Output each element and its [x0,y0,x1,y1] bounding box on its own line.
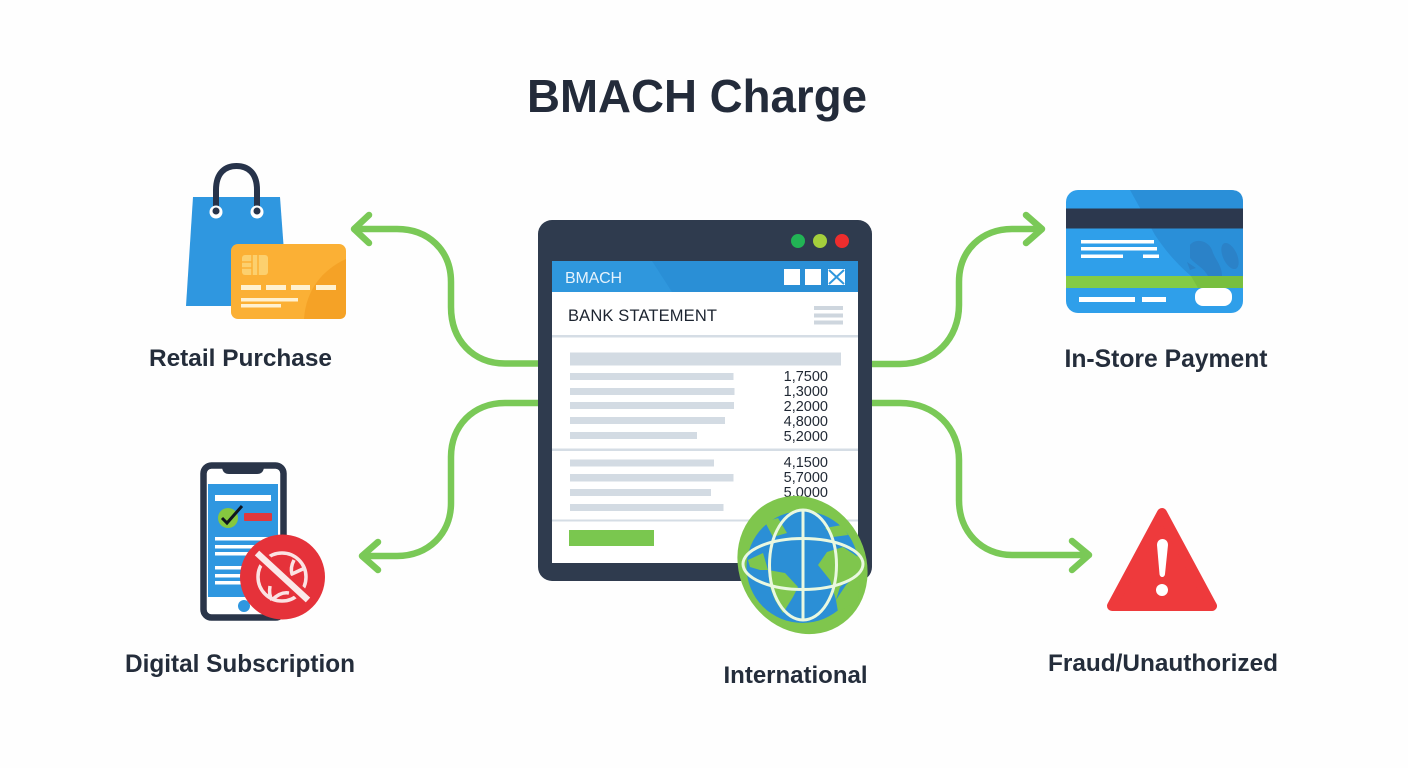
title: BMACH Charge [527,70,867,122]
amounts column: 5,0000 [784,485,828,501]
green stripe [1066,276,1243,288]
label: digital subscription: Digital Subscription [125,650,355,678]
menu icon [814,306,843,324]
blue header bar: BMACH [565,270,622,287]
amounts column [784,369,828,501]
phone content [215,495,272,584]
arrow: to digital subscription [362,403,539,570]
amounts column: 1,7500 [784,369,828,385]
amounts column: 4,8000 [784,414,828,430]
icon: globe [712,472,893,658]
window control dots [791,234,849,248]
amounts column: 4,1500 [784,455,828,471]
icon: card back [1066,190,1243,313]
card text lines [1079,240,1232,306]
phone body [204,466,284,618]
statement heading: BANK STATEMENT [568,307,717,325]
amounts column: 5,2000 [784,429,828,445]
arrow: to fraud [871,403,1089,570]
panel: bank statement window [125,166,1278,689]
label: retail purchase: Retail Purchase [149,345,332,372]
amounts column: 2,2000 [784,399,828,415]
arrow: to retail purchase [354,215,539,364]
magnetic stripe [1066,208,1243,228]
window content sheet [552,292,858,563]
label: in-store payment: In-Store Payment [1064,346,1268,373]
statement table [552,335,858,546]
amounts column: 5,7000 [784,470,828,486]
red blocked badge [240,534,325,620]
watermark [1187,240,1242,276]
label: fraud/unauthorized: Fraud/Unauthorized [1048,650,1278,677]
icon: warning triangle [1112,513,1212,606]
icon: phone with blocked subscription [204,466,325,620]
arrow: to in-store payment [871,215,1042,364]
blue header bar [552,261,858,292]
amounts column: 1,3000 [784,384,828,400]
orange card [231,244,346,319]
label: international: International [724,662,868,689]
green total bar [569,530,654,546]
shopping bag [186,166,288,306]
icon: shopping bag and credit card [186,166,346,319]
